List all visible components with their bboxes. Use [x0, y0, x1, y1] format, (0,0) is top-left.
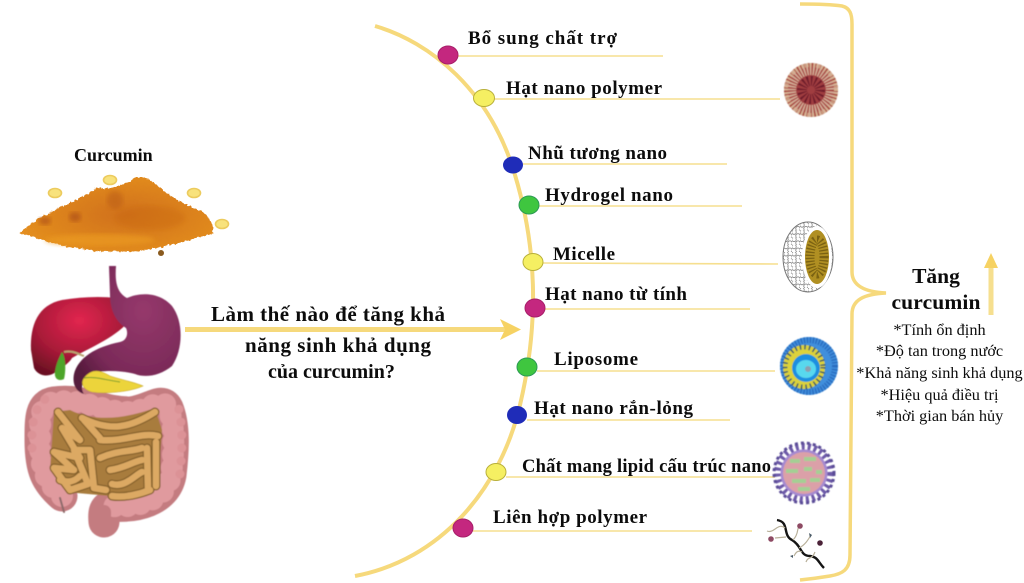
- method labels: Hạt nano polymer: [506, 78, 663, 99]
- main curved spine: [355, 26, 533, 576]
- stomach: [73, 266, 181, 394]
- icon: yellow dots around powder: [48, 176, 228, 228]
- benefits list: *Thời gian bán hủy: [876, 406, 1004, 425]
- icon: polymer nanoparticle: [784, 63, 838, 117]
- icon: digestive system: [31, 266, 182, 528]
- benefits list: *Khả năng sinh khả dụng: [856, 363, 1023, 382]
- liver: [31, 297, 128, 375]
- method labels: Bổ sung chất trợ: [468, 28, 617, 49]
- benefits list: *Hiệu quả điều trị: [880, 385, 999, 404]
- icon: polymer conjugate: [767, 520, 824, 568]
- icon: micelle: [783, 222, 833, 292]
- large intestine: [32, 396, 182, 528]
- icon: nanostructured lipid carrier: [774, 443, 834, 503]
- question text: Làm thế nào để tăng khả: [211, 302, 446, 326]
- arrow: increase: [984, 253, 998, 315]
- result heading: curcumin: [892, 290, 981, 314]
- benefits list: [856, 320, 1023, 425]
- question text: của curcumin?: [268, 361, 395, 383]
- question text: [211, 302, 446, 383]
- result heading: Tăng: [912, 264, 960, 288]
- method labels: Hạt nano từ tính: [545, 284, 687, 305]
- benefits list: *Tính ổn định: [893, 320, 986, 339]
- curcumin label: Curcumin: [74, 145, 153, 165]
- connector lines: [458, 56, 780, 531]
- method labels: Liên hợp polymer: [493, 507, 648, 528]
- question text: năng sinh khả dụng: [245, 333, 432, 357]
- result heading: [892, 264, 981, 314]
- method labels: Hydrogel nano: [545, 185, 673, 206]
- method labels: Liposome: [554, 349, 638, 370]
- right summary bracket: [800, 4, 886, 580]
- arrow: question pointer: [185, 319, 521, 340]
- method labels: Micelle: [553, 244, 615, 265]
- benefits list: *Độ tan trong nước: [876, 341, 1003, 360]
- icon: liposome: [780, 337, 838, 395]
- node dots: [438, 46, 545, 537]
- method labels: Hạt nano rắn-lỏng: [534, 398, 694, 419]
- small intestine: [50, 408, 162, 497]
- method labels: Chất mang lipid cấu trúc nano: [522, 457, 771, 477]
- gallbladder: [55, 352, 65, 380]
- icon: curcumin powder pile: [20, 178, 213, 256]
- method labels: [468, 28, 771, 528]
- pancreas: [82, 371, 143, 393]
- method labels: Nhũ tương nano: [528, 143, 667, 164]
